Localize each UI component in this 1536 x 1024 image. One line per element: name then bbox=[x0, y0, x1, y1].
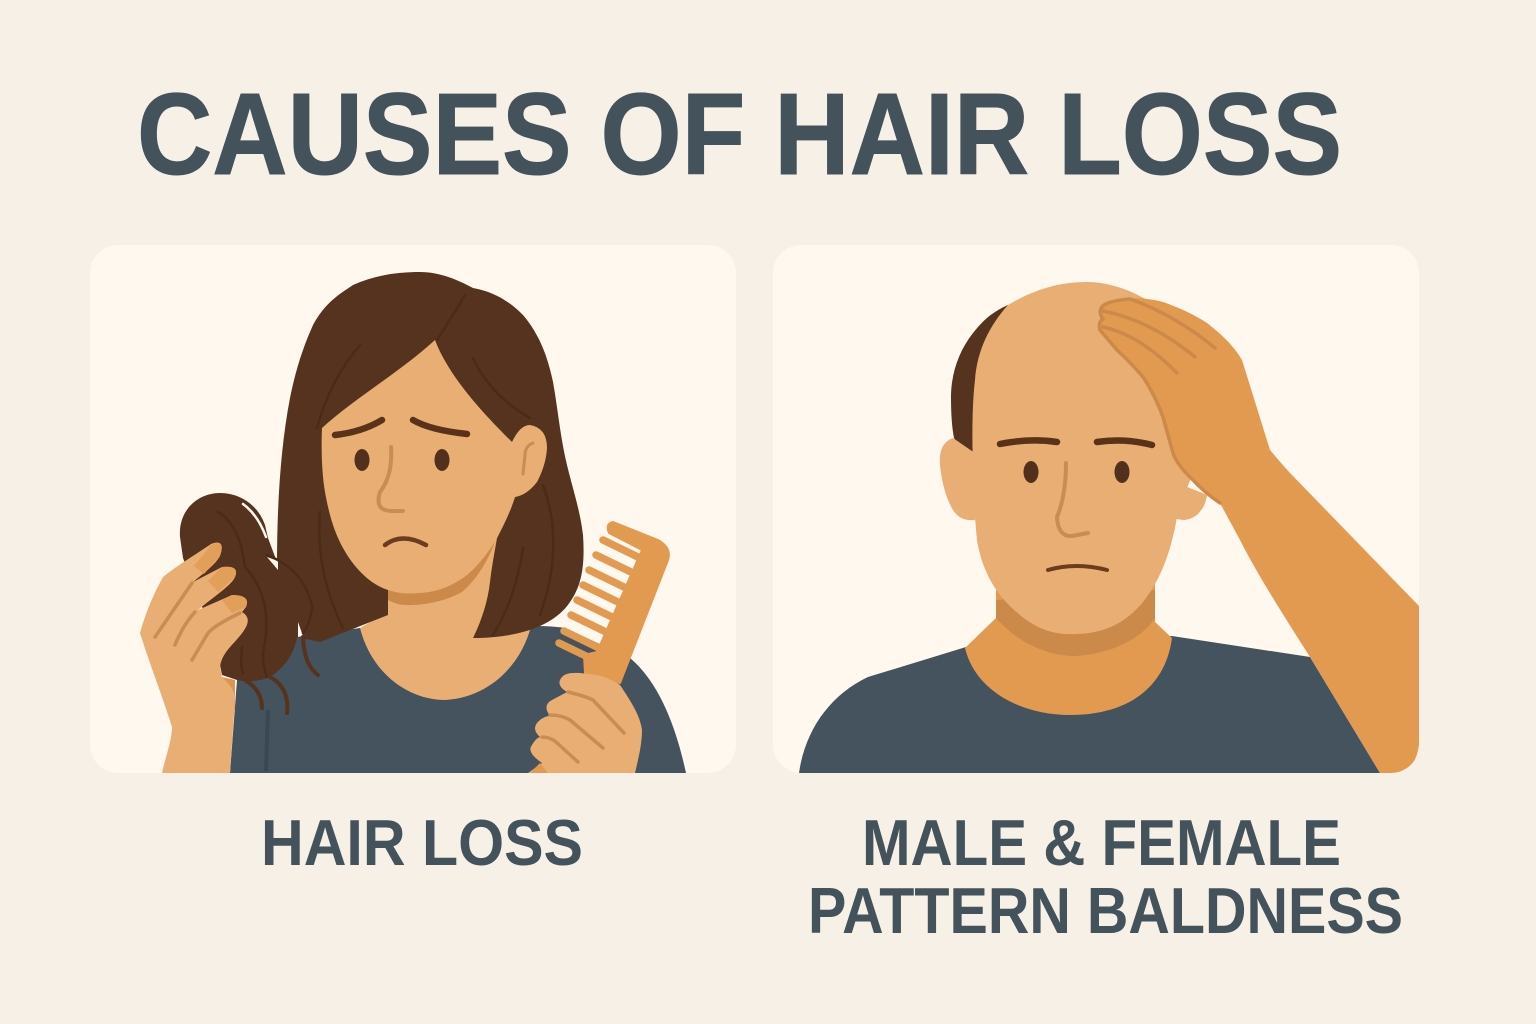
title: CAUSES OF HAIR LOSS bbox=[137, 69, 1342, 199]
loose hair strands bbox=[245, 637, 318, 713]
neck: man bbox=[965, 580, 1172, 715]
side hair: man bbox=[951, 305, 1008, 452]
arm and hand: man bbox=[1099, 298, 1419, 773]
neck shadow: woman bbox=[388, 536, 497, 605]
face: woman bbox=[322, 340, 518, 594]
label: male and female pattern baldness: PATTERN BALDNESS bbox=[808, 874, 1403, 947]
shirt: woman bbox=[230, 626, 686, 773]
held hair clump bbox=[180, 493, 314, 681]
facial features: woman bbox=[335, 420, 533, 545]
ear: woman bbox=[512, 425, 547, 497]
neck shadow: man bbox=[996, 590, 1155, 656]
left hand and arm bbox=[140, 542, 248, 773]
panel: male pattern baldness illustration bbox=[799, 282, 1419, 773]
head: man bbox=[972, 282, 1215, 634]
shirt: man bbox=[799, 636, 1380, 773]
shirt seam bbox=[266, 710, 268, 771]
facial features: man bbox=[1000, 440, 1152, 570]
right hand holding comb bbox=[528, 673, 642, 773]
ears: man bbox=[940, 438, 976, 520]
hair: woman bbox=[277, 272, 584, 642]
comb bbox=[559, 522, 669, 683]
panel: hair loss illustration bbox=[140, 272, 686, 773]
label: male and female pattern baldness: MALE & FEMALE bbox=[862, 806, 1341, 879]
label: hair loss: HAIR LOSS bbox=[261, 806, 583, 879]
hair strands bbox=[317, 295, 553, 635]
neck: woman bbox=[360, 530, 530, 700]
label: male and female pattern baldness bbox=[808, 806, 1403, 947]
